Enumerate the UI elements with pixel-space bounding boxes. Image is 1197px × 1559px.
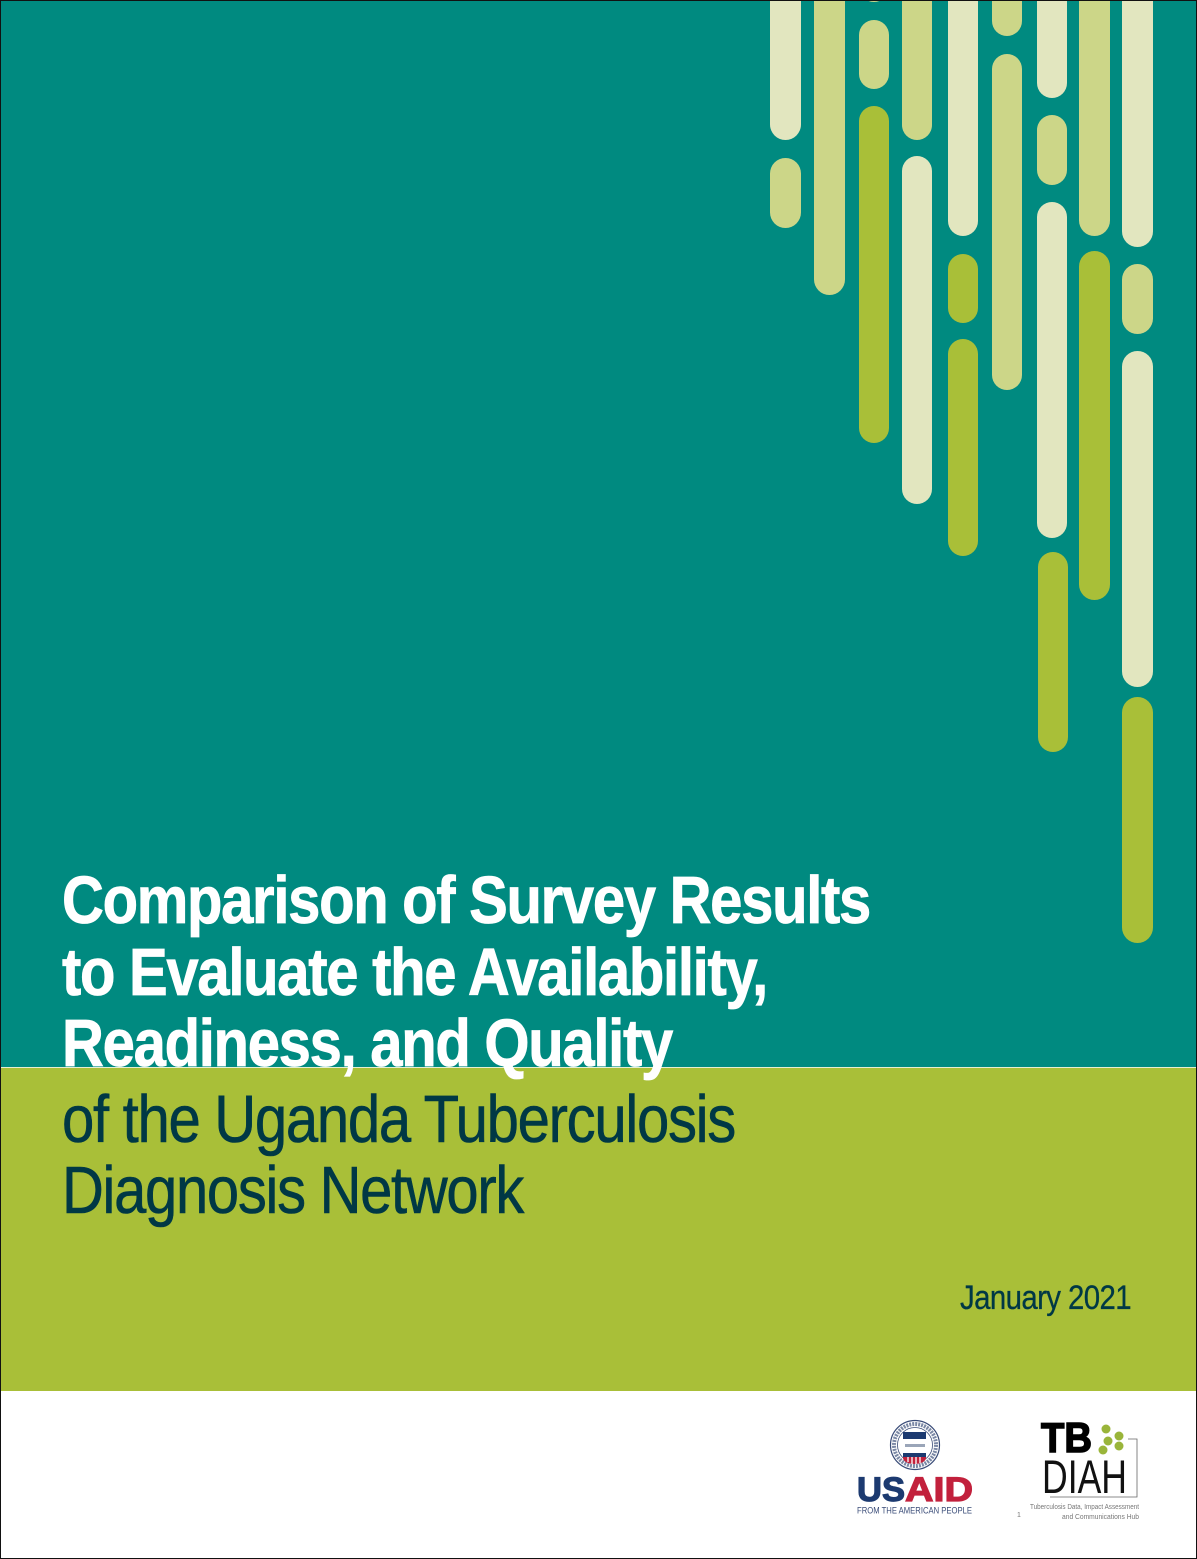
logo bracket [1050, 1439, 1137, 1497]
icon: green dots [1098, 1424, 1124, 1454]
TB DIAH tagline: Tuberculosis Data, Impact Assessment [1030, 1504, 1139, 1511]
title: Comparison of Survey Results [62, 863, 870, 938]
logo: USAID: AID [905, 1471, 973, 1509]
title: to Evaluate the Availability, [62, 935, 767, 1010]
USAID wordmark: US [857, 1471, 905, 1509]
subtitle: Diagnosis Network [62, 1153, 525, 1228]
page number: 1 [1017, 1512, 1021, 1519]
TB DIAH tagline: and Communications Hub [1062, 1514, 1139, 1521]
panel: green title band [0, 1068, 1197, 1391]
TB DIAH tagline [1030, 1504, 1139, 1521]
title: Readiness, and Quality [62, 1006, 673, 1081]
icon: USAID seal [890, 1420, 940, 1470]
decorative rounded bars [770, 0, 1153, 943]
subtitle: of the Uganda Tuberculosis [62, 1082, 735, 1157]
panel: teal upper background [0, 0, 1197, 1067]
logo: TB DIAH [1030, 1414, 1139, 1521]
subtitle [62, 1082, 735, 1228]
logo: USAID [857, 1420, 973, 1516]
TB wordmark: TB [1041, 1414, 1092, 1461]
date: January 2021 [960, 1279, 1131, 1317]
panel: white footer [0, 1391, 1197, 1559]
title [62, 863, 870, 1081]
USAID tagline: FROM THE AMERICAN PEOPLE [857, 1506, 972, 1516]
divider line [0, 1067, 1197, 1068]
DIAH wordmark: DIAH [1042, 1450, 1127, 1503]
